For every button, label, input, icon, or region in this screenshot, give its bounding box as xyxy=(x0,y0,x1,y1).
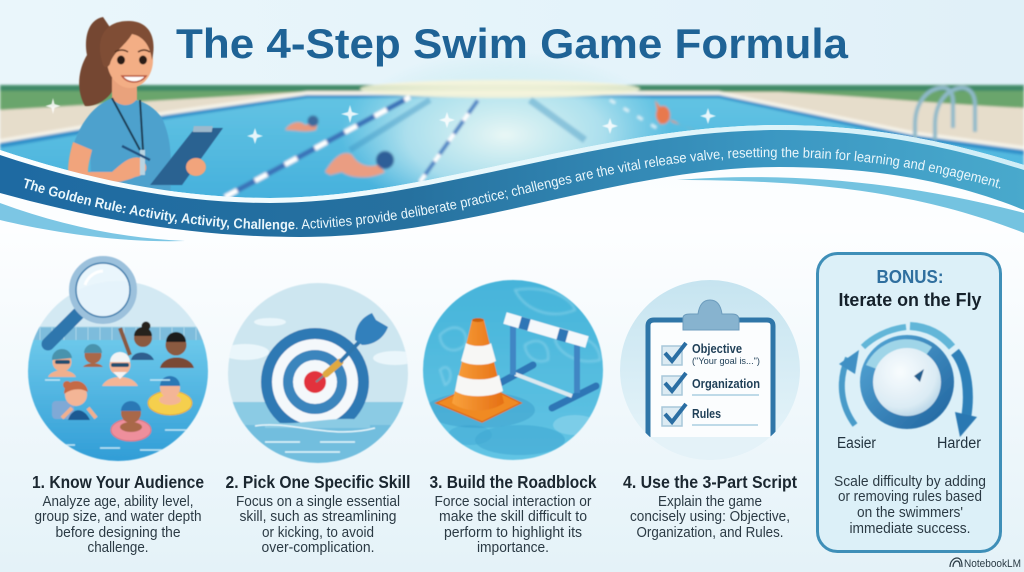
bonus heading: Iterate on the Fly xyxy=(838,290,982,310)
illustration: cone and hurdle xyxy=(423,280,603,460)
illustration: target and dart xyxy=(221,283,417,464)
checklist labels: Objective xyxy=(692,342,742,356)
label: harder: Harder xyxy=(937,435,981,452)
illustration: clipboard checklist xyxy=(620,280,800,460)
body: step 4 xyxy=(630,493,790,541)
panel: step 3 xyxy=(423,280,603,556)
body: bonus: Scale difficulty by adding xyxy=(834,473,986,490)
body: step 2: over-complication. xyxy=(262,539,374,556)
lane ropes xyxy=(236,97,406,194)
panel: step 2 xyxy=(221,283,417,556)
wave banner: lower swoosh right xyxy=(677,177,1024,233)
icon: hurdle xyxy=(500,318,596,408)
icon: dart xyxy=(316,313,388,382)
swimmers xyxy=(48,370,76,377)
sparkles xyxy=(46,98,716,144)
body: bonus xyxy=(834,473,986,537)
body: step 2: skill, such as streamlining xyxy=(240,508,396,525)
illustration: coach with clipboard xyxy=(68,17,223,200)
wave banner: lower swoosh left xyxy=(0,203,185,241)
bonus card xyxy=(818,254,1000,552)
wave banner: pale edge xyxy=(0,125,1024,225)
check marks xyxy=(665,343,686,422)
wave banner: band xyxy=(0,130,1024,237)
panel: step 1 xyxy=(28,260,208,556)
panel: bonus xyxy=(818,254,1000,552)
body: step 2: or kicking, to avoid xyxy=(262,524,374,541)
header sky xyxy=(0,0,1024,86)
body: step 3: perform to highlight its xyxy=(444,524,582,541)
heading: step 1: 1. Know Your Audience xyxy=(32,472,204,492)
body: bonus: immediate success. xyxy=(850,520,970,537)
body: step 2 xyxy=(236,493,400,556)
bonus label: BONUS: xyxy=(876,267,944,287)
title: The 4-Step Swim Game Formula xyxy=(176,20,849,67)
body: step 1 xyxy=(34,493,202,556)
body: step 3 xyxy=(434,493,592,556)
checklist labels xyxy=(692,342,760,421)
checklist labels: Rules xyxy=(692,407,721,421)
body: step 2: Focus on a single essential xyxy=(236,493,400,510)
body: step 4: concisely using: Objective, xyxy=(630,508,790,525)
swimmers xyxy=(285,122,318,131)
body: bonus: on the swimmers' xyxy=(857,504,963,521)
checkboxes xyxy=(662,346,682,426)
golden rule text: The Golden Rule: Activity, Activity, Challenge. Activities provide deliberate practice; challenges are the vital release valve, resetting the brain for learning and engagement. xyxy=(24,147,1000,232)
body: step 1: before designing the xyxy=(56,524,180,541)
checklist labels: ("Your goal is...") xyxy=(692,356,760,367)
icon: difficulty dial xyxy=(839,326,977,437)
icon: clipboard clip xyxy=(683,300,739,330)
body: step 4: Explain the game xyxy=(658,493,762,510)
panel: step 4 xyxy=(620,280,800,541)
body: step 1: Analyze age, ability level, xyxy=(42,493,194,510)
ladder xyxy=(915,88,975,140)
heading: step 4: 4. Use the 3-Part Script xyxy=(623,472,797,492)
label: easier: Easier xyxy=(837,435,876,452)
body: step 3: importance. xyxy=(477,539,549,556)
body: step 3: Force social interaction or xyxy=(434,493,592,510)
body: step 3: make the skill difficult to xyxy=(439,508,587,525)
checklist labels: Organization xyxy=(692,377,760,391)
pool scene xyxy=(0,62,1024,198)
icon: magnifying glass xyxy=(48,260,134,344)
icon: traffic cone xyxy=(436,318,521,422)
heading: step 3: 3. Build the Roadblock xyxy=(430,472,597,492)
body: step 4: Organization, and Rules. xyxy=(636,524,784,541)
body: step 1: group size, and water depth xyxy=(34,508,202,525)
illustration: swimmers in pool xyxy=(28,260,208,465)
heading: step 2: 2. Pick One Specific Skill xyxy=(226,472,410,492)
body: step 1: challenge. xyxy=(88,539,148,556)
body: bonus: or removing rules based xyxy=(838,488,982,505)
